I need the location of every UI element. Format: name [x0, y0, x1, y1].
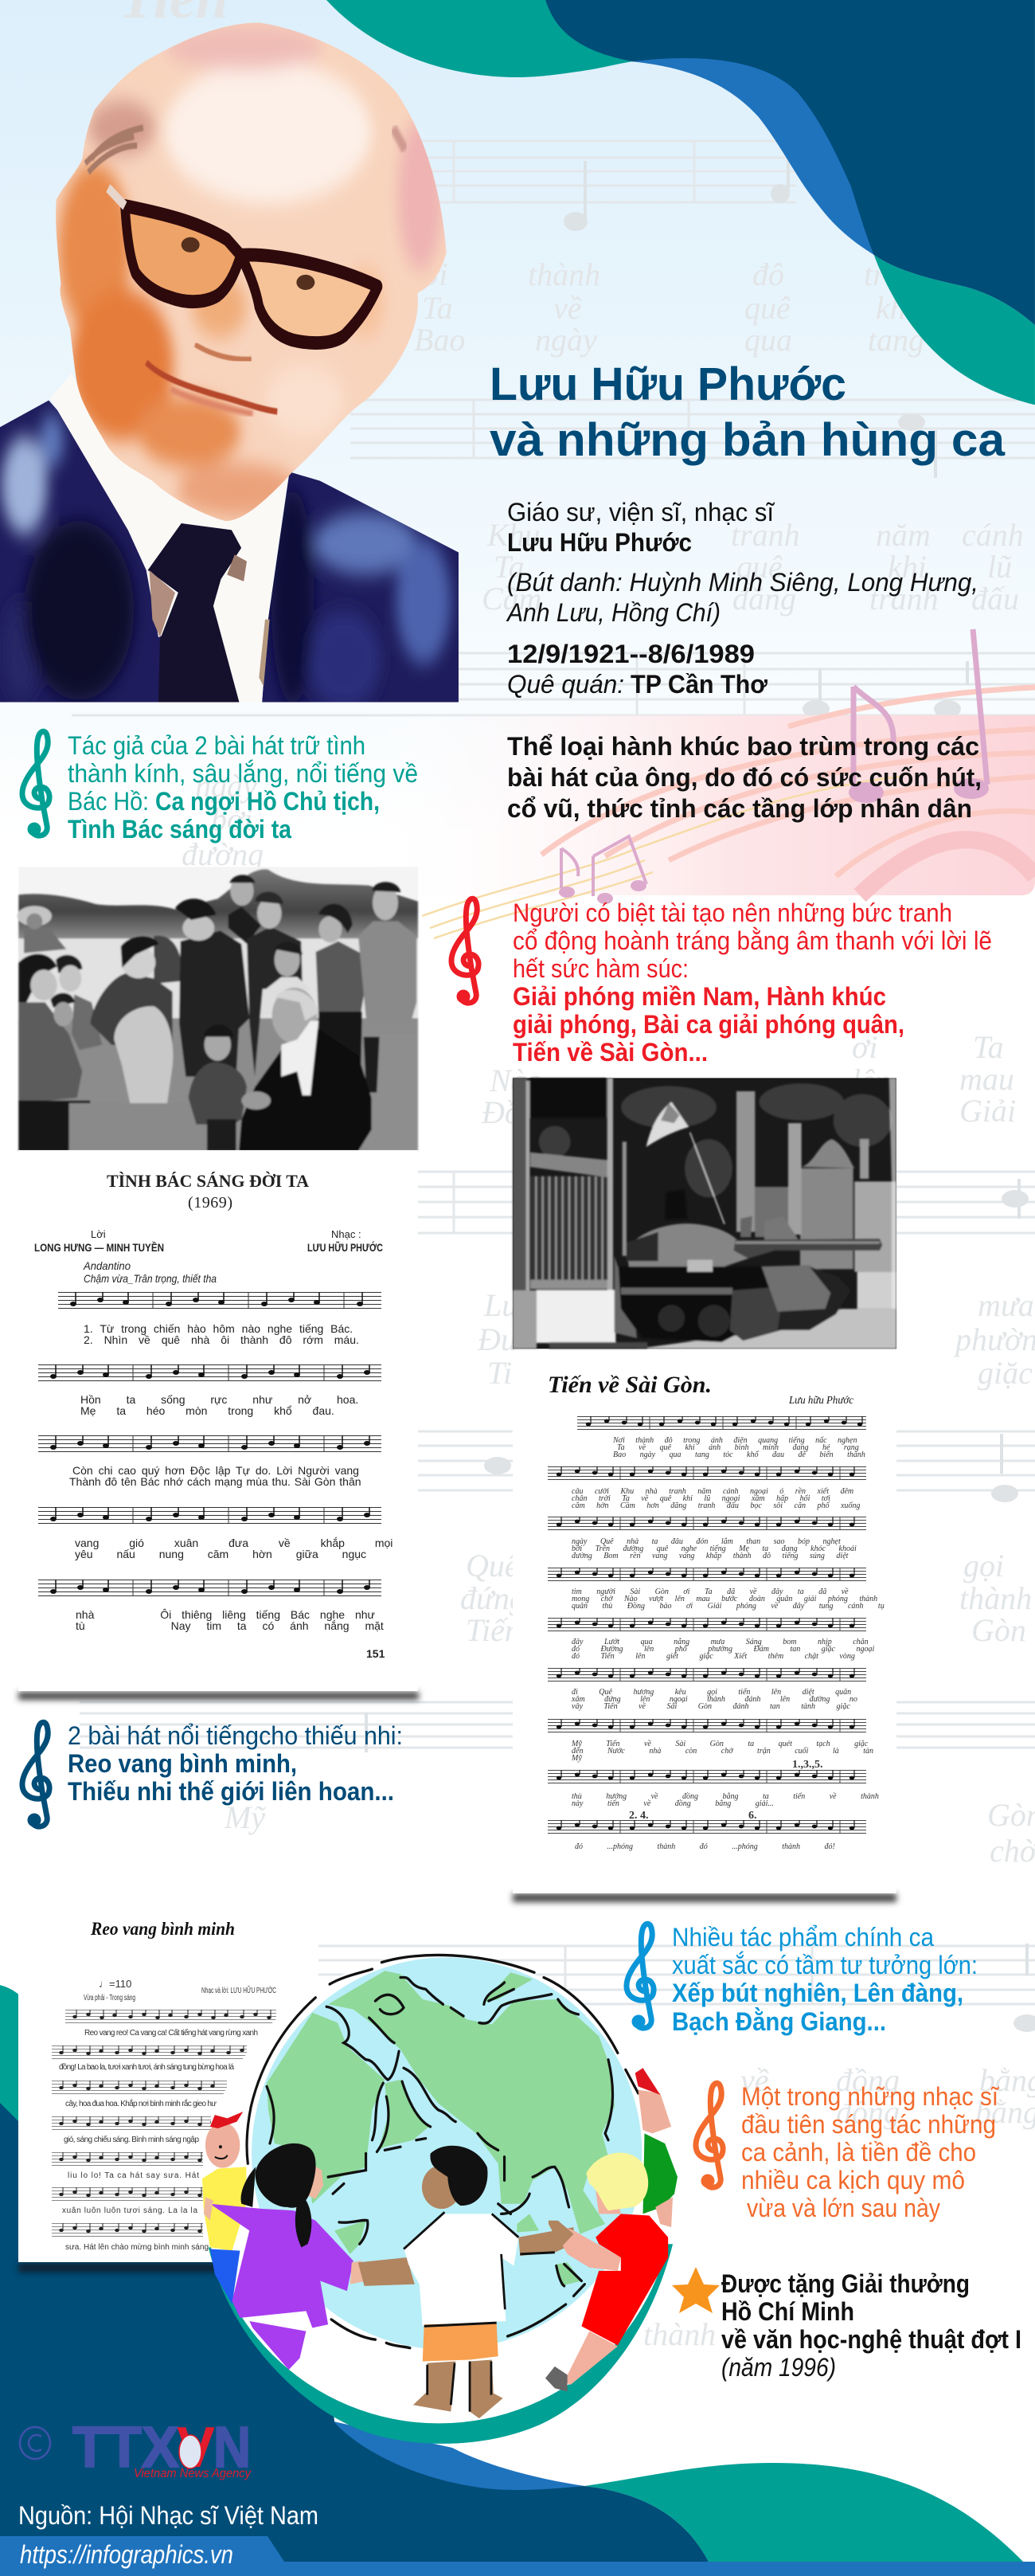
song sheet: Tình Bác sáng đời ta: LƯU HỮU PHƯỚC	[307, 1240, 383, 1254]
background: pale music staves and lyrics: quê	[736, 549, 783, 585]
text block: biography: (Bút danh: Huỳnh Minh Siêng, Long Hưng,	[507, 568, 978, 597]
text block: march genre	[507, 732, 982, 823]
photo: trees	[539, 1083, 892, 1197]
song sheet: Tiến về Sài Gòn: Lưu hữu Phước	[788, 1395, 854, 1407]
icon: navy treble clef	[22, 1722, 49, 1826]
song sheet: Tình Bác sáng đời ta: Thành đô tên Bác nhớ cách mạng mùa thu. Sài Gòn thân	[69, 1475, 361, 1488]
text block: Ho Chi Minh Prize: Được tặng Giải thưởng	[721, 2269, 970, 2298]
photo: woman in dark	[179, 930, 249, 1077]
photo: white wall	[536, 1290, 615, 1343]
photo: flag	[646, 1102, 689, 1147]
song sheet: Tiến về Sài Gòn: căm hờn Cầm hơn đăng tranh đấu bọc sôi căn phố xuống	[572, 1501, 860, 1510]
song sheet: Tiến về Sài Gòn: 2. 4.	[629, 1810, 648, 1822]
background: pale music staves and lyrics: bởi	[211, 801, 252, 837]
background: pale music staves and lyrics: đấu	[971, 581, 1019, 617]
text block: songs about Uncle Ho: Bác Hồ:	[68, 787, 149, 816]
globe: teal crescent	[209, 2244, 673, 2444]
globe: ocean	[252, 1957, 642, 2350]
text block: theatre songs	[741, 2082, 1000, 2222]
portrait: suit	[0, 401, 459, 702]
child: red shirt and blonde hair	[545, 2152, 668, 2391]
bottom wave shapes	[0, 1985, 1035, 2576]
background: pale music staves and lyrics: đô	[752, 256, 784, 292]
song sheet: Tiến về Sài Gòn: thù hướng về đồng bằng ta tiến về thành	[572, 1792, 879, 1801]
song sheet: Tình Bác sáng đời ta: tù Nay tim ta có ánh nắng mặt	[76, 1619, 384, 1632]
text block: liberation songs: hết sức hàm súc:	[513, 954, 689, 983]
source credit: Nguồn: Hội Nhạc sĩ Việt Nam	[18, 2501, 318, 2530]
text block: theatre songs: đầu tiên sáng tác những	[741, 2110, 996, 2139]
text block: biography	[506, 498, 978, 699]
background: pale music staves and lyrics: Ta	[494, 549, 525, 585]
text block: liberation songs: Tiến về Sài Gòn...	[513, 1038, 708, 1067]
song sheet: Reo vang bình minh: liu lo lo! Ta ca hát say sưa. Hát	[68, 2171, 199, 2180]
text block: liberation songs: Giải phóng miền Nam, Hành khúc	[513, 982, 886, 1011]
background: pale music staves and lyrics: lũ	[987, 549, 1012, 585]
song sheet: Tình Bác sáng đời ta: vang gió xuân đưa về khắp mọi	[75, 1537, 393, 1549]
song sheet: Reo vang bình minh	[18, 1859, 310, 2273]
background: pale music staves and lyrics: Lư	[483, 1287, 521, 1323]
song sheet: Tiến về Sài Gòn: đến Nước nhà còn chờ trận cuối là tàn	[572, 1747, 873, 1756]
logo: TTXVN Vietnam News Agency: N	[213, 2416, 251, 2480]
song sheet: Tiến về Sài Gòn: này tiến về đồng bằng giải...	[572, 1799, 774, 1808]
portrait of Lưu Hữu Phước	[0, 22, 459, 709]
icon: decorative music notes	[559, 629, 989, 904]
background: pale music staves and lyrics: Gòn	[971, 1612, 1026, 1648]
text block: theatre songs: Một trong những nhạc sĩ	[741, 2082, 1000, 2111]
text block: biography: Anh Lưu, Hồng Chí)	[506, 598, 721, 627]
logo: TTXVN Vietnam News Agency: TTX	[72, 2416, 179, 2480]
photo: soldiers	[665, 1189, 687, 1220]
text block: songs about Uncle Ho: Ca ngợi Hồ Chủ tịch,	[155, 787, 380, 816]
title	[490, 358, 1006, 466]
child: right back with red cap	[635, 2068, 678, 2227]
text block: songs for children: Reo vang bình minh,	[68, 1749, 297, 1778]
logo: TTXVN Vietnam News Agency: V	[177, 2416, 215, 2480]
background: pale music staves and lyrics: thành	[528, 256, 600, 292]
photo: left gate	[531, 1176, 607, 1288]
song sheet: Reo vang bình minh: Vừa phải - Trong sáng	[84, 1994, 135, 2002]
song sheet: Tình Bác sáng đời ta: TÌNH BÁC SÁNG ĐỜI TA	[107, 1171, 309, 1191]
logo: TTXVN Vietnam News Agency	[20, 2416, 252, 2480]
song sheet: Tiến về Sài Gòn: tim người Sài Gòn ơi Ta đã về đây ta đã về	[572, 1587, 849, 1596]
song sheet: Tình Bác sáng đời ta	[18, 1150, 419, 1700]
background: pale music staves and lyrics: về	[740, 2062, 769, 2098]
song sheet: Tiến về Sài Gòn: câu cười Khu nhà tranh năm cánh ngoại ó rền xiết đêm	[572, 1487, 853, 1496]
portrait: hair streaks	[85, 127, 143, 172]
photo: tank	[619, 1266, 775, 1342]
top teal wave	[326, 0, 633, 77]
background: pale music staves and lyrics: ơi	[422, 256, 447, 292]
text block: biography: Quê quán:	[507, 670, 624, 699]
portrait: glasses	[108, 188, 378, 343]
text block: biography: TP Cần Thơ	[631, 670, 767, 699]
background: pale music staves and lyrics: Ta	[422, 290, 453, 326]
background: pale music staves and lyrics: tang	[868, 322, 924, 358]
text block: march genre: Thể loại hành khúc bao trùm trong các	[507, 732, 979, 761]
song sheet: Tình Bác sáng đời ta: nhà Ôi thiêng liêng tiếng Bác nghe như	[76, 1608, 375, 1621]
photo: ground	[637, 1309, 896, 1349]
song sheet: Tình Bác sáng đời ta: 1. Từ trong chiến hào hôm nào nghe tiếng Bác.	[84, 1322, 353, 1335]
logo: TTXVN Vietnam News Agency: Vietnam News Agency	[134, 2467, 252, 2480]
song sheet: Tiến về Sài Gòn: xâm đứng lên ngoại thành đánh lên đường no	[571, 1695, 857, 1704]
text block: march genre: cổ vũ, thức tỉnh các tầng lớp nhân dân	[507, 794, 972, 823]
text block: biography: Lưu Hữu Phước	[507, 528, 692, 557]
text block: political songs: Nhiều tác phẩm chính ca	[672, 1923, 934, 1952]
text block: political songs: Bạch Đằng Giang...	[672, 2007, 886, 2036]
song sheet: Tiến về Sài Gòn: đây Lướt qua nắng mưa Sáng bom nhịp chân	[572, 1638, 869, 1646]
song sheet: Tiến về Sài Gòn: Bao ngày qua tang tóc khổ đau đè biển thành	[613, 1450, 865, 1459]
text block: biography: 12/9/1921--8/6/1989	[507, 640, 755, 668]
photo: man at right	[358, 922, 416, 1021]
song sheet: Tình Bác sáng đời ta: Chậm vừa_Trân trọng, thiết tha	[84, 1272, 217, 1285]
song sheet: Tiến về Sài Gòn: Ta về quê khi ánh bình minh đang hé rạng	[617, 1443, 859, 1452]
globe: land masses	[267, 1971, 615, 2286]
photo: rice bundle and grass	[114, 1006, 173, 1103]
pink music ribbon band	[358, 687, 1035, 938]
song sheet: Tình Bác sáng đời ta: 151	[366, 1647, 385, 1660]
background: pale music staves and lyrics: Bao	[414, 322, 465, 358]
background: pale music staves and lyrics: Ti	[487, 1355, 512, 1391]
song sheet: Tiến về Sài Gòn: mong chờ Nào vượt lên mau bước đoàn quân giải phóng thành	[572, 1595, 877, 1603]
text block: songs about Uncle Ho	[68, 731, 418, 844]
page background	[0, 0, 1035, 836]
background: pale music staves and lyrics: đồng	[836, 2094, 900, 2130]
portrait: head	[56, 22, 447, 521]
background: pale music staves and lyrics: ngày	[195, 768, 257, 804]
song sheet: Tình Bác sáng đời ta: Lời	[91, 1228, 106, 1240]
background: pale music staves and lyrics: lên	[852, 1063, 891, 1098]
song sheet: Reo vang bình minh: gió, sáng chiếu sáng. Bình minh sáng ngập	[64, 2135, 199, 2144]
song sheet: Tiến về Sài Gòn: chân trời Ta về quê khi lũ ngoại xâm hấp hối tơi	[572, 1494, 830, 1503]
song sheet: Tình Bác sáng đời ta: Andantino	[83, 1259, 131, 1272]
website url: https://infographics.vn	[20, 2540, 233, 2569]
text block: Ho Chi Minh Prize: Hồ Chí Minh	[721, 2297, 854, 2326]
photo: right gate	[755, 1187, 790, 1237]
background: pale music staves and lyrics: ơi	[852, 1029, 877, 1065]
photo: girl	[316, 942, 365, 1013]
child: purple shirt	[204, 2143, 366, 2370]
portrait: eyes	[182, 237, 200, 253]
song sheet: Tiến về Sài Gòn: Tiến về Sài Gòn.	[548, 1372, 712, 1398]
globe: white disk	[204, 1954, 674, 2423]
background: pale music staves and lyrics: kh	[876, 290, 906, 326]
song sheet: Tình Bác sáng đời ta: LONG HƯNG — MINH TUYỀN	[34, 1241, 164, 1254]
background: pale music staves and lyrics: Khu	[486, 517, 541, 553]
background: pale music staves and lyrics: Đồn	[481, 1094, 537, 1130]
text block: liberation songs	[513, 898, 992, 1067]
icon: light blue treble clef	[627, 1924, 654, 2028]
song sheet: Reo vang bình minh: Reo vang bình minh	[90, 1919, 235, 1939]
text block: theatre songs: nhiều ca kịch quy mô	[741, 2166, 965, 2194]
child: left back with red cap	[202, 2112, 246, 2304]
portrait: shirt and collar	[50, 374, 290, 702]
background: pale music staves and lyrics: đăng	[732, 581, 796, 617]
text block: biography: Giáo sư, viện sĩ, nhạc sĩ	[507, 498, 775, 527]
photo: Uncle Ho	[239, 1029, 372, 1151]
text block: political songs: xuất sắc có tầm tư tưởng lớn:	[672, 1951, 978, 1979]
background: pale music staves and lyrics: Mỹ	[224, 1799, 266, 1835]
text block: theatre songs: vừa và lớn sau này	[747, 2194, 940, 2222]
title: và những bản hùng ca	[490, 414, 1006, 466]
background: pale music staves and lyrics: năm	[876, 517, 931, 553]
song sheet: Tiến về Sài Gòn: 6.	[748, 1810, 756, 1822]
photo: left women and child	[18, 1002, 82, 1103]
song sheet: Reo vang bình minh: sưa. Hát lên chào mừng bình minh sáng	[65, 2243, 209, 2252]
icon: red treble clef	[451, 898, 478, 1003]
song sheet: Tình Bác sáng đời ta: Nhạc :	[331, 1228, 361, 1240]
background: pale music staves and lyrics: Nào	[489, 1063, 543, 1098]
photo: middle child	[189, 1062, 247, 1125]
text block: liberation songs: Người có biệt tài tạo nên những bức tranh	[513, 898, 952, 927]
background: pale music staves and lyrics: mau	[959, 1061, 1014, 1097]
background: pale music staves and lyrics: giặc	[978, 1355, 1033, 1391]
text block: songs about Uncle Ho: Tác giả của 2 bài hát trữ tình	[68, 731, 365, 760]
background: pale music staves and lyrics: gọi	[963, 1548, 1004, 1584]
icon: teal treble clef	[22, 731, 49, 836]
background: pale music staves and lyrics: Đư	[477, 1321, 521, 1357]
background: pale music staves and lyrics: đường	[182, 836, 264, 872]
song sheet: Reo vang bình minh: Nhạc và lời: LƯU HỮU PHƯỚC	[201, 1985, 276, 1995]
portrait: tie	[148, 523, 241, 702]
song sheet: Reo vang bình minh: đồng! La bao la, tươi xanh tươi, ánh sáng tung bừng hoa lá	[59, 2062, 234, 2072]
song sheet: Tiến về Sài Gòn: đi Quê hương kêu gọi tiến lên diệt quân	[572, 1688, 851, 1697]
song sheet: Tình Bác sáng đời ta: 2. Nhìn về quê nhà ôi thành đô rớm máu.	[84, 1333, 359, 1346]
background: pale music staves and lyrics: Ta	[973, 1029, 1004, 1065]
text block: political songs	[672, 1923, 978, 2036]
portrait: lens fill	[123, 202, 240, 302]
song sheet: Tiến về Sài Gòn	[513, 1356, 896, 1902]
text block: songs about Uncle Ho: Tình Bác sáng đời ta	[68, 815, 291, 844]
song sheet: Reo vang bình minh: Reo vang reo! Ca vang ca! Cất tiếng hát vang rừng xanh	[84, 2028, 258, 2038]
song sheet: Tiến về Sài Gòn: Mỹ	[571, 1754, 582, 1763]
background: pale music staves and lyrics: Cầm	[482, 581, 542, 617]
song sheet: Tình Bác sáng đời ta: yêu nấu nung căm hờn giữa ngục	[75, 1548, 366, 1560]
portrait: nose and mouth	[195, 344, 252, 359]
background: pale music staves and lyrics: Quê	[466, 1548, 519, 1584]
background: pale music staves and lyrics: Tiến	[466, 1612, 521, 1648]
song sheet: Reo vang bình minh: xuân luôn luôn tươi sáng. La la la	[62, 2206, 197, 2215]
child: centre with white shirt	[358, 2146, 574, 2418]
song sheet: Tiến về Sài Gòn: vây Tiến về Sài Gòn đánh tan tành giặc	[572, 1702, 850, 1711]
icon: orange star	[672, 2267, 720, 2313]
background: pale music staves and lyrics: thành	[959, 1580, 1032, 1616]
photo: tank at Independence Palace gate	[513, 1078, 896, 1349]
text block: liberation songs: giải phóng, Bài ca giải phóng quân,	[513, 1010, 904, 1039]
background: pale music staves and lyrics: mưa	[978, 1287, 1034, 1323]
text block: songs for children	[68, 1721, 403, 1806]
background: pale music staves and lyrics: ngày	[535, 322, 597, 358]
background: pale music staves and lyrics: đứng	[460, 1580, 525, 1616]
text block: political songs: Xếp bút nghiên, Lên đàng,	[672, 1979, 963, 2007]
background: pale music staves and lyrics: tranh	[869, 581, 939, 617]
song sheet: Tình Bác sáng đời ta: Hồn ta sống rực như nở hoa.	[80, 1393, 358, 1406]
song sheet: Tiến về Sài Gòn: bởi Trên đường quê nghe tiếng Mẹ ta đang khóc khoái	[572, 1544, 857, 1553]
text block: march genre: bài hát của ông, do đó có sức cuốn hút,	[507, 763, 982, 792]
song sheet: Reo vang bình minh: cây, hoa đua hoa. Khắp nơi bình minh rắc gieo hư	[65, 2098, 217, 2108]
song sheet: Tình Bác sáng đời ta: Mẹ ta héo mòn trong khổ đau.	[80, 1404, 334, 1417]
song sheet: Tình Bác sáng đời ta: Còn chi cao quý hơn Độc lập Tự do. Lời Người vang	[72, 1464, 359, 1477]
song sheet: Tiến về Sài Gòn: 1.,3.,5.	[792, 1759, 823, 1771]
text block: Ho Chi Minh Prize: (năm 1996)	[721, 2353, 836, 2382]
title: Lưu Hữu Phước	[490, 358, 846, 410]
song sheet: Tiến về Sài Gòn: Nơi thành đô trong ánh điện quang tiếng nấc nghẹn	[612, 1436, 857, 1445]
background: pale music staves and lyrics: cánh	[962, 517, 1024, 553]
text block: songs about Uncle Ho: thành kính, sâu lắng, nổi tiếng về	[68, 759, 418, 788]
text block: songs for children: Thiếu nhi thế giới liên hoan...	[68, 1777, 394, 1806]
photo: Uncle Ho with villagers	[18, 867, 418, 1151]
song sheet: Tiến về Sài Gòn: quân thù Đồng bào ơi Giải phóng về đây tung cánh tụ	[572, 1602, 885, 1611]
text block: songs for children: 2 bài hát nổi tiếngcho thiếu nhi:	[68, 1721, 403, 1750]
background: pale music staves and lyrics: khi	[888, 549, 927, 585]
song sheet: Tiến về Sài Gòn: Mỹ Tiến về Sài Gòn ta quét tạch giặc	[571, 1740, 869, 1748]
song sheet: Reo vang bình minh: ♩=110	[99, 1978, 131, 1990]
photo: hat person	[24, 926, 66, 953]
background: pale music staves and lyrics: Giải	[959, 1093, 1016, 1129]
text block: theatre songs: ca cảnh, là tiền đề cho	[741, 2138, 976, 2167]
photo: smiling woman	[90, 973, 173, 1050]
icon: orange treble clef	[696, 2083, 723, 2187]
song sheet: Tiến về Sài Gòn: ngày Quê nhà ta đâu đón lắm than sao bóp nghẹt	[572, 1537, 841, 1546]
photo: white shirt child	[261, 977, 310, 1016]
background: pale music staves and lyrics: đồng	[836, 2062, 900, 2098]
top right wave shapes	[545, 0, 1035, 405]
globe: coast and rim outlines	[267, 1977, 613, 2296]
song sheet: Tiến về Sài Gòn: đó Tiến lên giết giặc Xiết thêm chật vòng	[572, 1652, 855, 1661]
background: pale music staves and lyrics: về	[553, 290, 582, 326]
globe illustration with children	[202, 1954, 678, 2444]
song sheet: Tình Bác sáng đời ta: (1969)	[188, 1194, 232, 1212]
text block: Ho Chi Minh Prize	[721, 2269, 1021, 2382]
text block: liberation songs: cổ động hoành tráng bằng âm thanh với lời lẽ	[513, 926, 992, 955]
song sheet: Tiến về Sài Gòn: đó ...phóng thành đó ...phóng thành đó!	[575, 1842, 835, 1851]
background: pale music staves and lyrics: quê	[744, 290, 791, 326]
background: pale music staves and lyrics: thành	[643, 2316, 716, 2352]
background: pale music staves and lyrics: qua	[744, 322, 792, 358]
background: pale music staves and lyrics: tr	[864, 256, 885, 292]
photo: man and boy at back	[228, 906, 261, 944]
background: pale music staves and lyrics: tranh	[731, 517, 800, 553]
song sheet: Tiến về Sài Gòn: đó Đường lên phố phường Đám tan giặc ngoại	[572, 1645, 874, 1654]
photo: buffalo	[154, 936, 182, 984]
song sheet: Tiến về Sài Gòn: đường Bom rền vang vang khắp thành đô tiếng súng diệt	[572, 1552, 849, 1560]
